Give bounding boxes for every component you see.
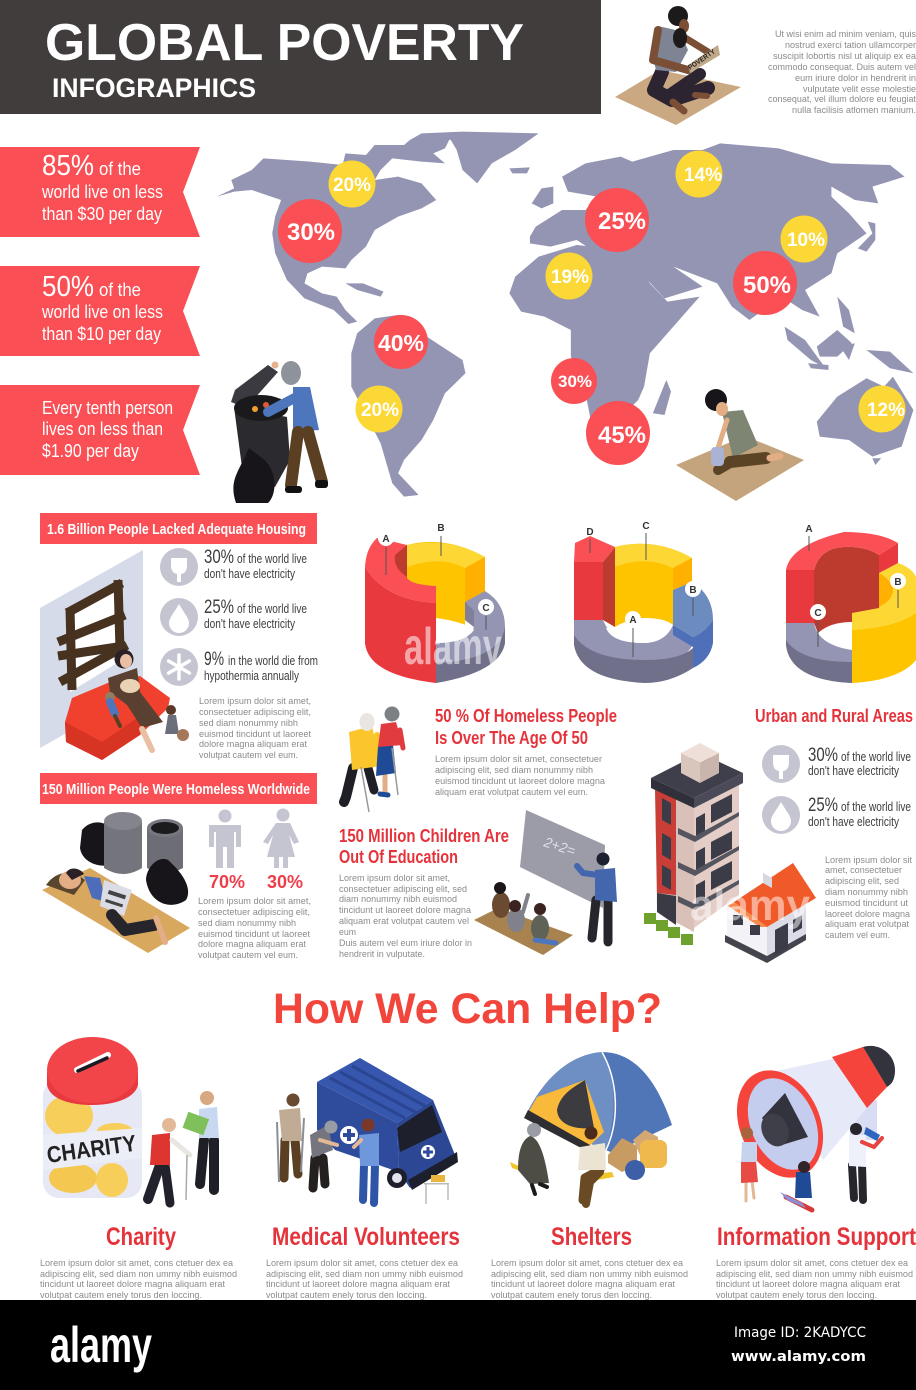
stat: electricity 30 percent: 30% [204,547,234,568]
text block: urban and rural: adipiscing elit, sed [825,876,899,887]
column: shelters: Shelters [551,1223,632,1251]
column: information support [716,1223,916,1301]
illustration: medical van and volunteers [277,1058,458,1204]
heading: homeless worldwide: 150 Million People Were Homeless Worldwide [42,781,310,798]
man giving money [183,1091,219,1190]
illustration: apartment building and house: alamy [690,881,811,930]
donut one labels: B [437,523,445,534]
text block: over the age of 50 [435,706,617,798]
illustration: charity jar and two men: CHARITY [45,1130,138,1168]
stat: water 25 percent: of the world live [237,602,307,616]
text block: over the age of 50: adipiscing elit, sed diam nonummy nibh [435,765,593,776]
title banner: GLOBAL POVERTY [45,14,524,72]
column: shelters: adipiscing elit, sed diam non ummy nibh euismod [491,1269,688,1280]
heading: homeless worldwide [40,773,317,804]
man with tablet [849,1123,882,1200]
text block: housing: dolore magna aliquam erat [199,739,307,750]
stat: water 25 percent: don't have electricity [204,617,296,631]
illustration: man sitting with poverty sign [615,6,741,125]
donut three labels [805,524,906,647]
donut one labels: C [482,603,490,614]
stat: urban electricity: 30% [808,745,838,766]
text block: urban and rural: euismod tincidunt ut [825,898,908,909]
column: shelters: volutpat cautem enely torus den loccing. [491,1290,652,1301]
footer bar with image credit: alamy [50,1317,152,1373]
banner: every tenth person: $1.90 per day [42,440,140,461]
column: charity: volutpat cautem enely torus den loccing. [40,1290,202,1301]
column: information support: Lorem ipsum dolor sit amet, cons ctetuer dex ea [716,1258,909,1269]
column: charity: Lorem ipsum dolor sit amet, cons ctetuer dex ea [40,1258,234,1269]
text block: homeless [198,896,311,961]
text block: urban and rural: laoreet dolore magna [825,909,911,920]
illustration: tent with people and supplies [510,1052,672,1204]
text block: children out of education: 150 Million Children Are [339,826,509,846]
text block: children out of education: diam nonummy nibh euismod [339,894,457,905]
text block: children out of education: consectetuer adipiscing elit, sed [339,884,467,895]
text block: homeless: euismod tincidunt ut laoreet [198,929,310,940]
map percentage markers: 14% [684,165,722,186]
banner: 50 percent: of the [99,279,141,300]
column: medical volunteers: volutpat cautem enely torus den loccing. [266,1290,427,1301]
heading: lacked adequate housing [40,513,317,544]
stat: water 25 percent [160,597,307,636]
column: medical volunteers: tincidunt ut laoreet dolore magna aliquam erat [266,1279,450,1290]
footer bar with image credit [0,1300,916,1390]
text block: urban and rural [825,855,912,941]
elderly patient [310,1120,338,1188]
stat: urban water [762,795,911,834]
illustration: apartment building and house [644,743,816,963]
illustration: man sitting with poverty sign: POVERTY [687,48,717,72]
chart: 3D donut one: alamy [404,618,502,676]
stat: water 25 percent: 25% [204,597,234,618]
column: charity [40,1223,237,1301]
column: charity: tincidunt ut laoreet dolore magna aliquam erat [40,1279,225,1290]
illustration: person kneeling with jar [676,389,804,501]
column: shelters: Lorem ipsum dolor sit amet, cons ctetuer dex ea [491,1258,684,1269]
icon: man 70 percent: 70% [209,872,245,892]
icon: woman 30 percent [263,808,303,892]
person with laptop [780,1161,812,1210]
footer bar with image credit: www.alamy.com [731,1349,866,1365]
text block: housing: sed diam nonummy nibh [199,718,298,729]
text block: over the age of 50: 50 % Of Homeless People [435,706,617,726]
world map [217,132,913,497]
text block: over the age of 50: aliquam erat volutpat cautem vel eum. [435,787,588,798]
icon: woman 30 percent: 30% [267,872,303,892]
illustration: teacher and children [474,810,617,955]
text block: homeless: sed diam nonummy nibh [198,918,296,929]
column: medical volunteers [266,1223,463,1301]
nurse [354,1118,379,1203]
title banner: INFOGRAPHICS [52,73,256,103]
seated man [578,1126,614,1204]
column: medical volunteers: Lorem ipsum dolor sit amet, cons ctetuer dex ea [266,1258,459,1269]
banner: 50 percent [0,266,200,356]
donut three labels: C [814,608,822,619]
banner: 50 percent: 50% [42,271,94,303]
text block: children out of education: hendrerit in vulputate. [339,949,425,960]
stat: hypothermia 9 percent [160,648,318,686]
illustration: person searching trash bin [231,361,328,503]
map percentage markers: 19% [551,267,589,288]
text block: children out of education: Lorem ipsum dolor sit amet, [339,873,450,884]
text block: over the age of 50: Lorem ipsum dolor sit amet, consectetuer [435,754,603,765]
donut three labels: B [894,577,902,588]
map percentage markers: 10% [787,230,825,251]
chart: 3D donut three [786,524,916,683]
text block: housing [199,696,311,761]
text block: urban and rural: diam nonummy nibh [825,887,908,898]
donut two labels: A [629,615,637,626]
banner: 85 percent [0,147,200,237]
donut three labels: A [805,524,813,535]
illustration: charity jar and two men [43,1037,219,1203]
donut one labels [378,523,494,630]
text block: homeless: Lorem ipsum dolor sit amet, [198,896,311,907]
column: medical volunteers: Medical Volunteers [272,1223,460,1251]
map percentage markers: 30% [287,219,335,246]
chart: 3D donut one [365,523,505,683]
text block: children out of education [339,826,509,960]
column: information support: volutpat cautem enely torus den loccing. [716,1290,877,1301]
text block: children out of education: Duis autem vel eum iriure dolor in [339,938,472,949]
text block: homeless: dolore magna aliquam erat [198,939,306,950]
illustration: megaphone with three people [721,1046,895,1210]
donut two labels [586,521,701,657]
column: shelters: tincidunt ut laoreet dolore magna aliquam erat [491,1279,675,1290]
stat: hypothermia 9 percent: 9% [204,649,224,670]
banner: 50 percent: than $10 per day [42,323,162,344]
illustration: person sleeping beside bins [42,812,190,953]
text block: urban and rural: amet, consectetuer [825,865,903,876]
text block: urban and rural: cautem vel eum. [825,930,890,941]
text block: housing: consectetuer adipiscing elit, [199,707,311,718]
map percentage markers: 20% [333,175,371,196]
chart: 3D donut two [574,521,713,683]
banner: 85 percent: world live on less [41,181,163,202]
map percentage markers: 20% [361,400,399,421]
heading: lacked adequate housing: 1.6 Billion People Lacked Adequate Housing [47,521,306,538]
illustration: elderly couple [344,706,403,812]
map percentage markers: 45% [598,422,646,449]
text block: housing: volutpat cautem vel eum. [199,750,298,761]
text block: children out of education: aliquam erat volutpat cautem vel [339,916,469,927]
text block: urban and rural: aliquam erat volutpat [825,919,909,930]
column: medical volunteers: adipiscing elit, sed diam non ummy nibh euismod [266,1269,463,1280]
map percentage markers: 25% [598,208,646,235]
map percentage markers: 12% [867,400,905,421]
stat: urban electricity [762,745,911,783]
intro text block [768,29,916,116]
stat: electricity 30 percent: of the world live [237,552,307,566]
banner: every tenth person [0,385,200,475]
banner: 50 percent: world live on less [41,301,163,322]
heading and stats: urban and rural areas [755,706,913,834]
stat: urban water: 25% [808,795,838,816]
map percentage markers: 40% [378,330,424,356]
seated woman [510,1123,549,1194]
donut two labels: C [642,521,650,532]
old man with cane [148,1118,190,1203]
map percentage markers: 30% [558,372,592,391]
map percentage markers [278,150,906,465]
text block: over the age of 50: euismod tincidunt ut laoreet dolore magna [435,776,606,787]
stat: electricity 30 percent: don't have electricity [204,567,296,581]
illustration: family on sofa by boarded window [40,550,189,760]
text block: children out of education: tincidunt ut laoreet dolore magna [339,905,472,916]
text block: housing: euismod tincidunt ut laoreet [199,729,311,740]
icon: man 70 percent [209,810,245,892]
donut one labels: A [382,534,390,545]
donut two labels: D [586,527,594,538]
heading: how we can help: How We Can Help? [273,985,662,1033]
text block: homeless: volutpat cautem vel eum. [198,950,298,961]
column: charity: Charity [106,1223,176,1251]
banner: 85 percent: than $30 per day [42,203,163,224]
column: shelters [491,1223,688,1301]
text block: urban and rural: Lorem ipsum dolor sit [825,855,912,866]
stat: electricity 30 percent [160,547,307,586]
banner: 85 percent: 85% [42,150,94,182]
stat: hypothermia 9 percent: hypothermia annually [204,669,300,683]
title banner [0,0,601,114]
column: information support: tincidunt ut laoreet dolore magna aliquam erat [716,1279,900,1290]
woman with tablet [741,1127,758,1201]
map percentage markers: 50% [743,272,791,299]
man on crutches [277,1094,304,1182]
stat: hypothermia 9 percent: in the world die from [228,654,318,668]
banner: every tenth person: Every tenth person [42,397,173,418]
footer bar with image credit: Image ID: 2KADYCC [734,1325,866,1341]
text block: over the age of 50: Is Over The Age Of 50 [435,728,588,748]
banner: 85 percent: of the [99,158,141,179]
donut two labels: B [689,585,697,596]
text block: housing: Lorem ipsum dolor sit amet, [199,696,311,707]
text block: children out of education: Out Of Education [339,847,458,867]
text block: children out of education: eum [339,927,356,938]
column: charity: adipiscing elit, sed diam non ummy nibh euismod [40,1269,237,1280]
illustration: teacher and children: 2+2= [541,833,577,859]
text block: homeless: consectetuer adipiscing elit, [198,907,310,918]
banner: every tenth person: lives on less than [42,418,163,439]
